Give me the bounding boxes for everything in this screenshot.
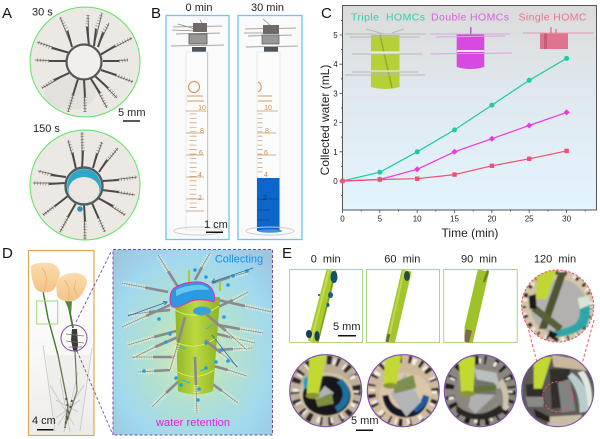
photo: ring at 90 min (444, 355, 516, 427)
photo: ring at 60 min (367, 355, 439, 427)
photo: cylinder at 0 min (166, 16, 229, 240)
panel: D (2, 245, 272, 436)
x-axis tick labels: 20 (487, 214, 497, 224)
photo: stem at 0 min (290, 270, 362, 342)
photo: cylinder at 0 min: 8 (200, 128, 204, 135)
photo: enlarged view at 120 min (522, 270, 594, 342)
photo: stem at 90 min (444, 270, 517, 342)
scale bar 5 mm: 5 mm (333, 321, 360, 333)
scale bar 5 mm: 5 mm (351, 415, 378, 427)
series: double HOMCs (342, 109, 570, 182)
x-axis tick labels (340, 214, 572, 224)
time label 150 s: 150 s (33, 123, 60, 135)
panel letter B: B (151, 5, 161, 22)
legend label triple: Triple HOMCs (351, 12, 425, 24)
y-axis tick labels: 2 (333, 119, 338, 128)
y-axis tick labels: 0 (333, 177, 338, 186)
panel: A (2, 5, 146, 240)
green inset marker (37, 301, 58, 324)
label: collecting: Collecting (215, 254, 263, 266)
x-axis tick labels: 5 (378, 214, 383, 224)
label: water retention: water retention (155, 417, 230, 429)
icon: single HOMC device (523, 27, 594, 49)
photo: device at 150 s (30, 130, 140, 240)
photo: device at 30 s (30, 7, 140, 117)
panel letter D: D (2, 245, 13, 262)
time label 0 min: 0 min (186, 2, 212, 14)
y-axis tick labels: 5 (333, 31, 338, 40)
green cylinder (175, 297, 220, 394)
icon: double HOMC device (430, 27, 512, 69)
line chart (318, 6, 596, 240)
y-axis tick labels: 3 (333, 89, 338, 98)
water droplets (142, 268, 249, 402)
time label 0 min: 0 min (311, 254, 341, 266)
panel letter E: E (282, 245, 292, 262)
panel letter C: C (321, 5, 332, 22)
arrow: inflow left (128, 302, 167, 316)
photo: cylinder at 0 min: 10 (198, 105, 206, 112)
photo: cylinder at 0 min: 6 (199, 150, 203, 157)
photo: cylinder at 30 min with blue water: 8 (265, 128, 269, 135)
x-axis title: Time (min) (442, 226, 498, 240)
series: triple HOMCs (340, 56, 569, 184)
photo: cylinder at 30 min with blue water: 2 (263, 195, 267, 202)
back spikes (122, 253, 272, 407)
y-axis tick labels (333, 31, 338, 186)
icon: triple HOMC device (345, 29, 426, 89)
x-axis tick labels: 25 (525, 214, 534, 224)
arrow: inflow top right (212, 268, 253, 282)
y-axis tick labels: 4 (333, 60, 338, 69)
x-axis tick labels: 30 (562, 214, 572, 224)
zoom connector lines (76, 250, 113, 435)
legend label single: Single HOMC (518, 12, 587, 24)
y-axis tick labels: 1 (333, 148, 338, 157)
time label 120 min: 120 min (534, 254, 576, 266)
panel letter A: A (2, 5, 12, 22)
x-axis tick labels: 0 (340, 214, 345, 224)
photo: ring at 120 min (522, 355, 594, 427)
panel: B (151, 2, 302, 240)
photo: cylinder at 30 min with blue water: 10 (264, 105, 272, 112)
panel: C (318, 5, 596, 240)
photo: cylinder at 30 min with blue water: 4 (264, 172, 268, 179)
photo: cylinder at 30 min with blue water: 6 (264, 150, 268, 157)
front spikes (170, 313, 247, 413)
arrow: lower right (212, 335, 237, 367)
scale bar 1 cm: 1 cm (204, 219, 228, 231)
purple inset marker (61, 325, 87, 351)
photo: cylinder at 30 min with blue water (238, 16, 302, 240)
x-axis tick labels: 15 (450, 214, 459, 224)
photo: cylinder at 0 min: 2 (198, 195, 202, 202)
scale bar 5 mm: 5 mm (118, 107, 146, 119)
time label 30 min: 30 min (251, 2, 284, 14)
photo: cylinder at 0 min: 4 (198, 172, 202, 179)
series: single HOMC (340, 149, 569, 183)
photo: stem at 60 min (366, 270, 440, 342)
panel: E (282, 245, 594, 431)
illustration: device close-up (113, 250, 272, 435)
legend label double: Double HOMCs (431, 12, 509, 24)
zoom connector lines (526, 320, 594, 397)
y-axis title: Collected water (mL) (318, 65, 332, 175)
photo: roses in vase (28, 250, 94, 436)
x-axis tick labels: 10 (413, 214, 422, 224)
water cup with magenta outline (170, 282, 215, 307)
time label 90 min: 90 min (461, 254, 497, 266)
time label 30 s: 30 s (32, 6, 53, 18)
time label 60 min: 60 min (384, 254, 420, 266)
scale bar 4 cm: 4 cm (32, 415, 56, 427)
photo: ring at 0 min (290, 355, 362, 427)
